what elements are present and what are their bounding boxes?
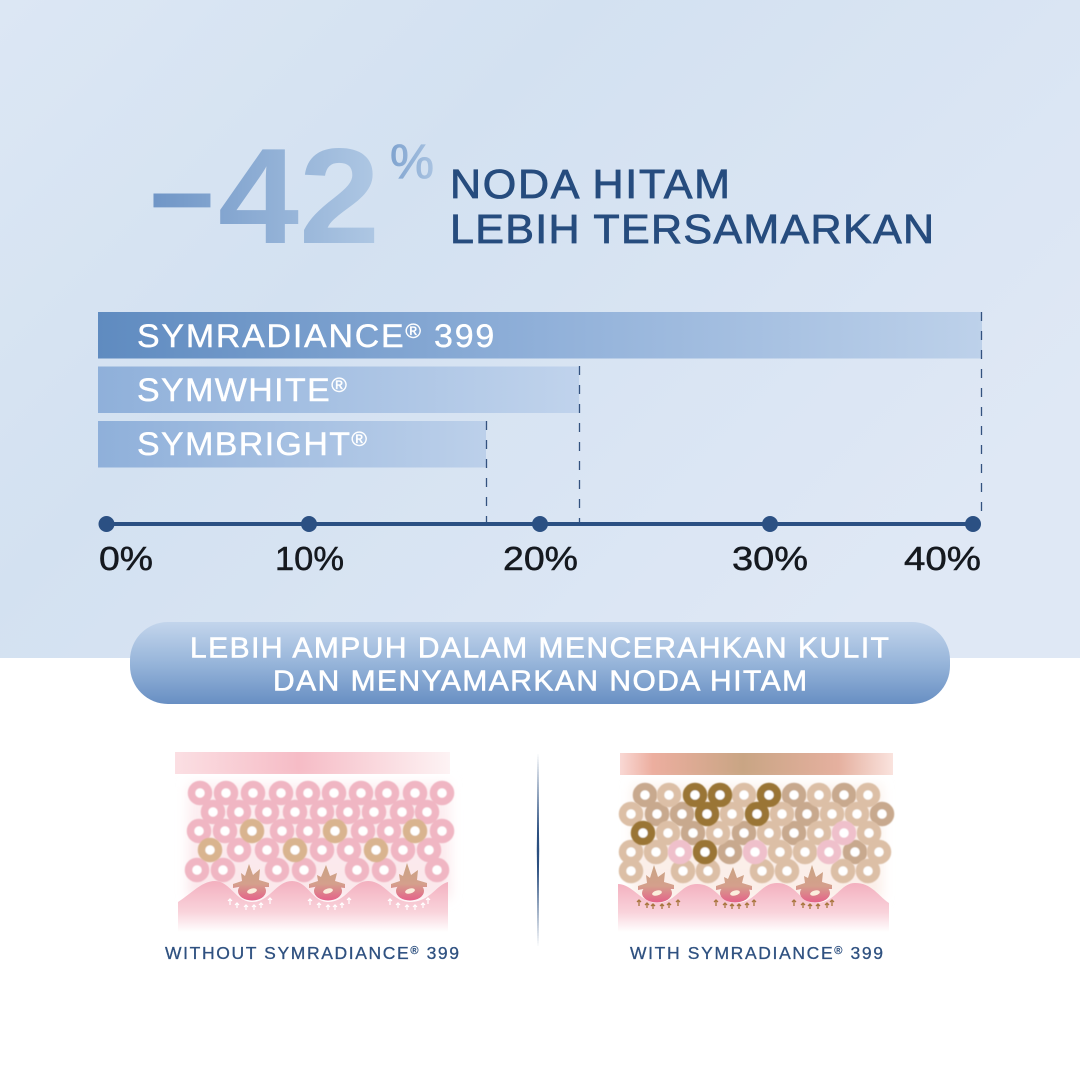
pink cells (672, 824, 852, 860)
white arrows (228, 898, 430, 910)
axis labels: 30% (732, 540, 808, 577)
heading: noda hitam lebih tersamarkan (450, 161, 934, 252)
caption: WITH SYMRADIANCE (630, 943, 833, 963)
heading: noda hitam lebih tersamarkan: LEBIH TERSAMARKAN (450, 206, 934, 252)
heading: noda hitam lebih tersamarkan: NODA HITAM (450, 161, 730, 207)
axis (98, 516, 981, 532)
bar: Symwhite (98, 366, 579, 413)
caption: WITHOUT SYMRADIANCE (165, 943, 409, 963)
bar: Symradiance 399: ® (405, 321, 421, 343)
axis labels: 10% (275, 540, 344, 577)
callout pill: DAN MENYAMARKAN NODA HITAM (273, 666, 807, 697)
bar: Symradiance 399: 399 (423, 318, 494, 354)
tan skin cells (202, 822, 424, 858)
diagram: with Symradiance 399 (618, 753, 893, 963)
bar: Symbright: ® (351, 429, 367, 451)
brown arrows (637, 900, 834, 909)
axis labels (99, 540, 981, 577)
bar: Symbright (98, 421, 486, 468)
dermis waves (618, 883, 889, 932)
headline stat: -42%: – (150, 111, 214, 268)
caption: ® (410, 945, 418, 957)
bar: Symradiance 399 (98, 312, 982, 358)
bar chart (98, 312, 982, 577)
skin surface strip (175, 752, 450, 774)
dark brown cells (634, 786, 778, 860)
pink skin cells (188, 784, 450, 878)
headline stat: -42% (150, 111, 434, 272)
callout pill: LEBIH AMPUH DALAM MENCERAHKAN KULIT (190, 633, 889, 664)
medium tan cells (636, 786, 890, 860)
bar: Symbright: SYMBRIGHT (137, 426, 350, 462)
bar: Symwhite: ® (331, 375, 347, 397)
center divider (537, 753, 539, 947)
axis labels: 40% (904, 540, 981, 577)
axis labels: 0% (99, 540, 153, 577)
caption: 399 (844, 943, 883, 963)
melanocytes (233, 863, 427, 900)
bar: Symwhite: SYMWHITE (137, 372, 330, 408)
diagram: without Symradiance 399 (165, 752, 459, 963)
melanocytes (638, 865, 832, 902)
skin surface strip (620, 753, 893, 775)
bar: Symradiance 399: SYMRADIANCE (137, 318, 404, 354)
callout pill (130, 622, 950, 704)
headline stat: -42%: 42 (218, 120, 380, 272)
light tan cells (622, 786, 888, 880)
dermis waves (178, 881, 448, 932)
headline stat: -42%: % (390, 136, 434, 189)
axis labels: 20% (503, 540, 578, 577)
caption: 399 (420, 943, 459, 963)
caption: ® (834, 945, 842, 957)
background panel (0, 0, 1080, 658)
